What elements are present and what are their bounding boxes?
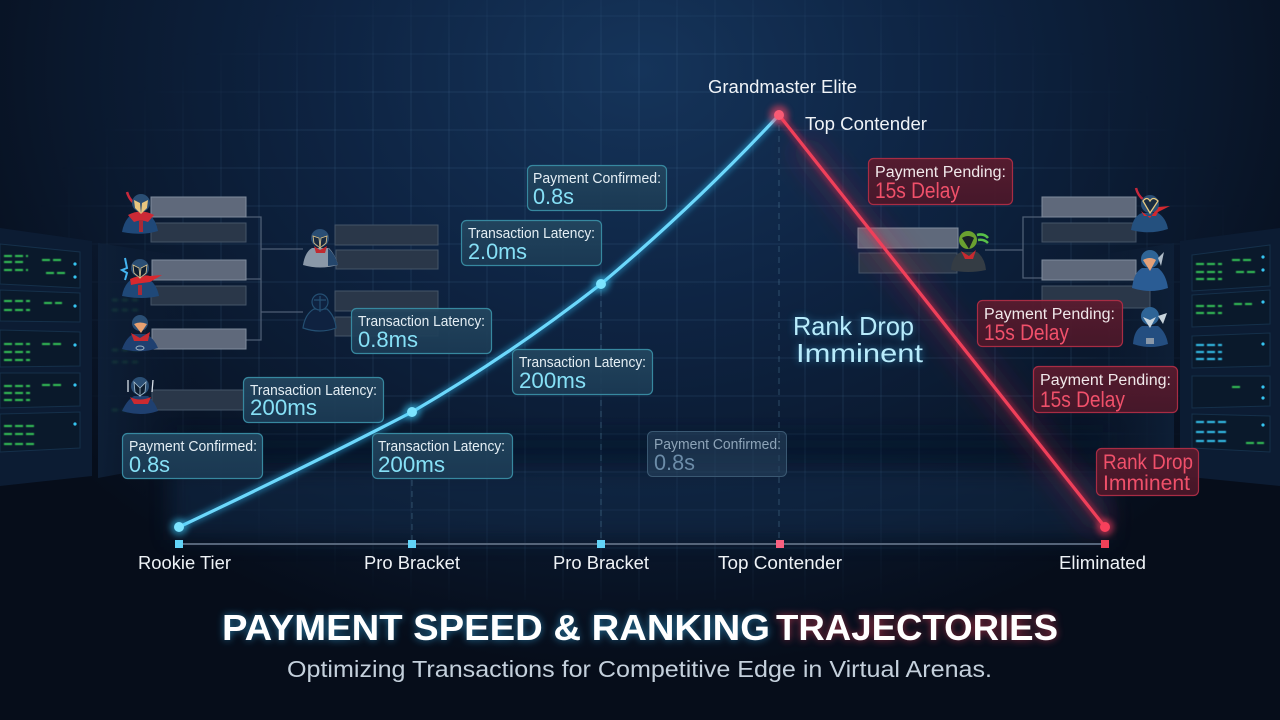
perspective grid	[92, 2, 1186, 594]
peak labels: Grandmaster Elite	[708, 77, 857, 97]
blue trajectory line	[179, 115, 779, 527]
card: latency 200ms upper	[244, 378, 384, 422]
red line glow halo	[800, 142, 1105, 527]
card: pending 2	[978, 300, 1122, 346]
card: confirmed top: Payment Confirmed:	[533, 170, 661, 187]
avatar: left 1	[122, 192, 158, 234]
card: confirmed faded: Payment Confirmed:	[654, 436, 781, 453]
x axis: Top Contender	[718, 553, 842, 573]
card: pending 2: 15s Delay	[984, 320, 1069, 345]
avatar: bracket silver	[303, 229, 338, 268]
avatar: right 1	[1131, 188, 1170, 232]
card: latency 200ms upper: 200ms	[250, 395, 317, 420]
avatar: right 3	[1133, 307, 1168, 347]
card: pending 1	[868, 158, 1012, 204]
avatar: left 2	[122, 258, 162, 298]
avatar: bracket outline	[303, 294, 336, 331]
peak labels	[708, 77, 927, 134]
card: pending 1: Payment Pending:	[875, 164, 1006, 181]
floor glow band	[170, 432, 1110, 540]
card: rank drop red: Imminent	[1103, 472, 1190, 495]
right server racks	[1080, 228, 1280, 486]
card: confirmed faded	[648, 432, 786, 476]
avatar: left 4	[122, 377, 158, 414]
x axis: Pro Bracket	[553, 553, 649, 573]
callout: rank drop imminent: Rank Drop	[793, 311, 914, 341]
card: latency 0.8ms	[352, 308, 492, 354]
callout: rank drop imminent	[793, 311, 924, 368]
card: confirmed lower left	[122, 434, 262, 478]
card: pending 3: 15s Delay	[1040, 387, 1125, 412]
card: latency 200ms lower	[372, 434, 512, 478]
transaction card group: behind line	[122, 308, 492, 478]
title	[222, 607, 1058, 648]
avatar: left 3	[122, 315, 158, 351]
callout: rank drop imminent: Imminent	[796, 338, 924, 368]
red trajectory line	[779, 115, 1105, 527]
card: latency 200ms middle: Transaction Latency:	[519, 354, 646, 371]
x axis	[138, 540, 1146, 573]
title: PAYMENT SPEED & RANKING	[222, 607, 770, 648]
card: pending 3	[1034, 366, 1178, 412]
card: latency 2.0ms: 2.0ms	[468, 239, 527, 264]
callout: rank drop imminent: Imminent	[796, 338, 924, 368]
vertical drop lines	[412, 125, 779, 540]
card: confirmed top	[528, 166, 666, 210]
card: latency 200ms middle: 200ms	[519, 368, 586, 393]
title: TRAJECTORIES	[776, 607, 1058, 648]
card: confirmed lower left: Payment Confirmed:	[129, 438, 257, 455]
title: PAYMENT SPEED & RANKING	[222, 607, 770, 648]
card: rank drop red	[1096, 448, 1198, 496]
subtitle: Optimizing Transactions for Competitive Edge in Virtual Arenas.	[287, 656, 992, 682]
left server racks	[0, 228, 195, 486]
card: latency 0.8ms: 0.8ms	[358, 327, 418, 352]
callout: rank drop imminent: Rank Drop	[793, 311, 914, 341]
data points	[170, 105, 1114, 536]
bracket: right	[858, 197, 1150, 308]
card: latency 200ms lower: 200ms	[378, 452, 445, 477]
bracket: left	[151, 197, 438, 410]
card: latency 200ms lower: Transaction Latency:	[378, 438, 505, 455]
card: pending 2: Payment Pending:	[984, 306, 1115, 323]
x axis: Rookie Tier	[138, 553, 231, 573]
card: confirmed top: 0.8s	[533, 184, 574, 209]
card: latency 2.0ms	[462, 220, 602, 266]
peak labels: Top Contender	[805, 114, 927, 134]
avatar: right 2	[1132, 250, 1168, 291]
x axis: Pro Bracket	[364, 553, 460, 573]
card: pending 1: 15s Delay	[875, 178, 960, 203]
card: confirmed faded: 0.8s	[654, 450, 695, 475]
avatar: green	[951, 231, 988, 272]
card: rank drop red: Rank Drop	[1103, 451, 1193, 474]
card: latency 2.0ms: Transaction Latency:	[468, 225, 595, 242]
x axis: Eliminated	[1059, 553, 1146, 573]
title: TRAJECTORIES	[776, 607, 1058, 648]
card: latency 200ms upper: Transaction Latency:	[250, 382, 377, 399]
card: latency 0.8ms: Transaction Latency:	[358, 313, 485, 330]
card: confirmed lower left: 0.8s	[129, 452, 170, 477]
card: pending 3: Payment Pending:	[1040, 372, 1171, 389]
card: latency 200ms middle	[512, 350, 652, 394]
